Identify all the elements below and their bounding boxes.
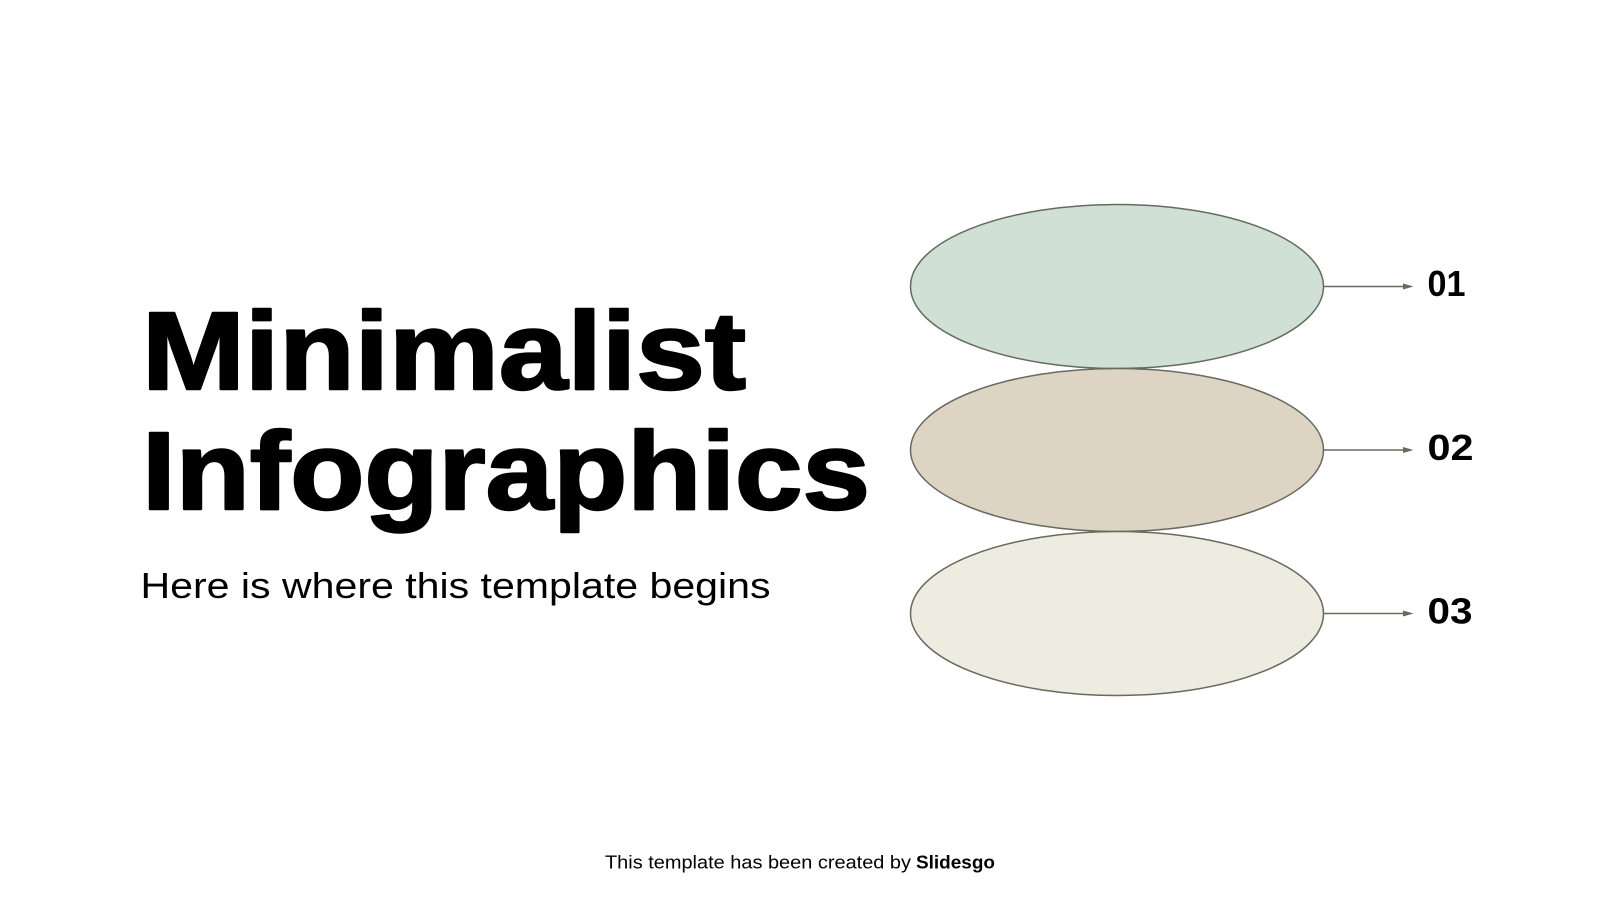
label 01: 01: [1428, 263, 1466, 304]
title: Infographics: [142, 410, 870, 533]
title: [142, 290, 870, 533]
footer credit: This template has been created by: [605, 852, 911, 872]
panel: stacked ellipses with numbered arrows: [910, 204, 1474, 696]
title: Minimalist: [142, 290, 746, 413]
arrow 03: [1324, 610, 1414, 616]
arrow 02: [1324, 447, 1414, 453]
ellipse 03: [910, 532, 1324, 696]
ellipse 01: [910, 204, 1324, 368]
footer credit: Slidesgo: [916, 852, 995, 872]
label 03: 03: [1428, 590, 1472, 632]
arrow 01: [1324, 284, 1414, 290]
ellipse 02: [910, 368, 1324, 532]
subtitle: Here is where this template begins: [140, 565, 770, 606]
label 02: 02: [1428, 427, 1474, 468]
